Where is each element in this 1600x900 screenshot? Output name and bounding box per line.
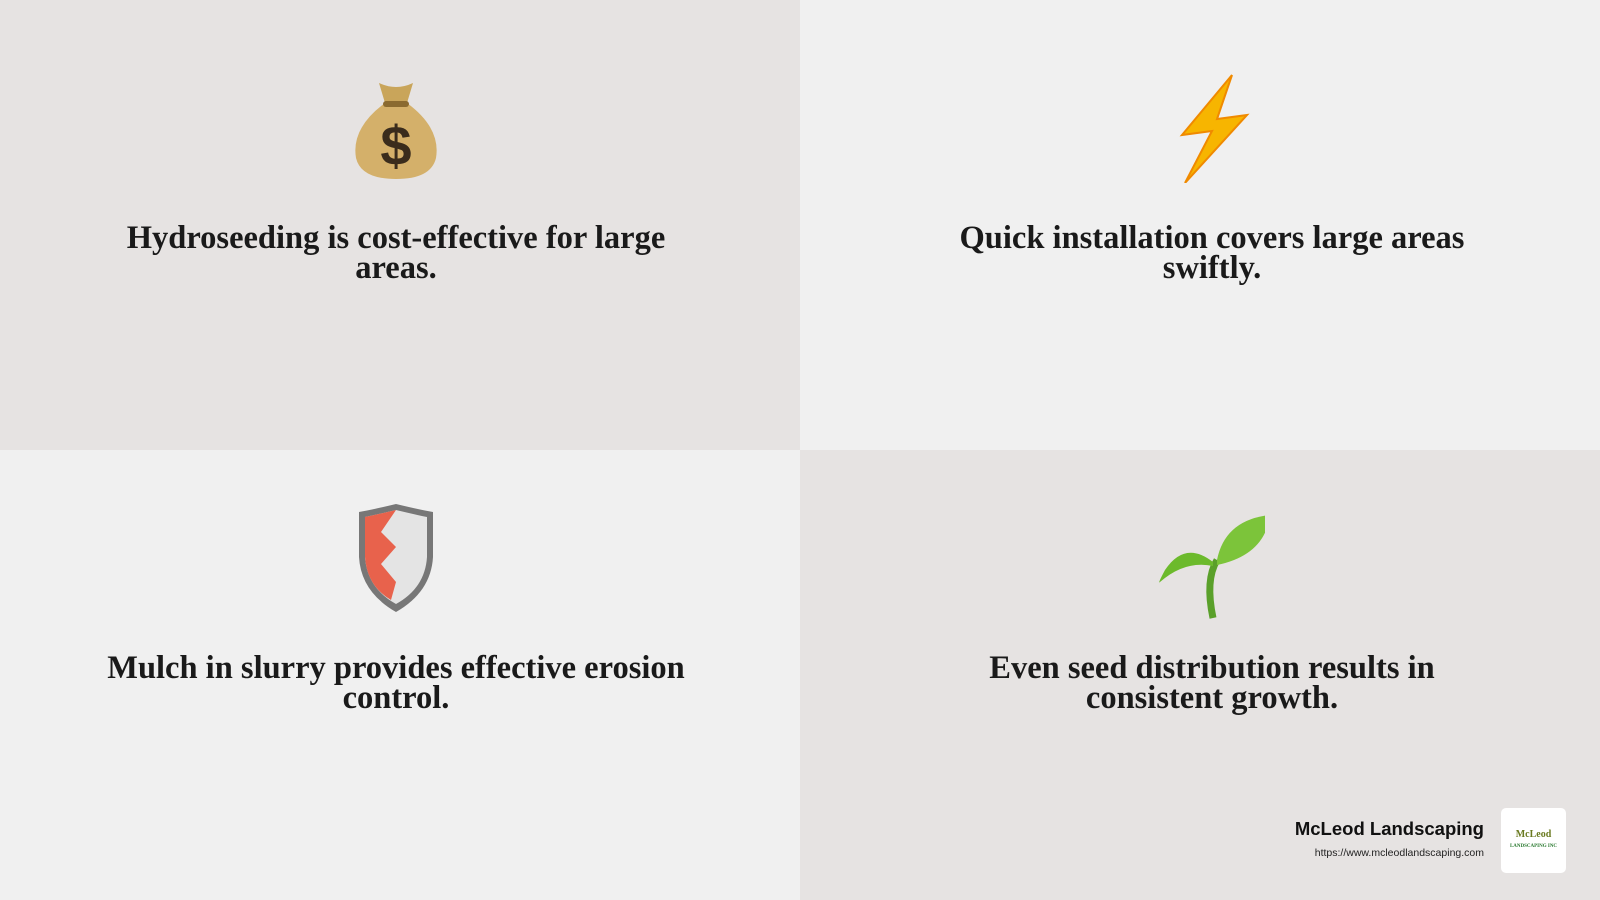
logo <box>1501 808 1566 873</box>
panel: cost-effective <box>0 0 800 450</box>
heading: consistent growth <box>989 650 1435 716</box>
brand name: McLeod Landscaping <box>1295 818 1484 839</box>
heading: cost-effective: areas. <box>355 250 437 286</box>
panel: quick installation <box>800 0 1600 450</box>
brand url: https://www.mcleodlandscaping.com <box>1315 847 1484 859</box>
icon: money bag <box>355 83 437 179</box>
logo: LANDSCAPING INC <box>1510 844 1557 849</box>
icon: sprout <box>1159 516 1265 619</box>
heading: erosion control: control. <box>343 680 449 716</box>
heading: quick installation: swiftly. <box>1163 250 1261 286</box>
icon: shield <box>359 504 433 612</box>
panel: erosion control <box>0 450 800 900</box>
panel: consistent growth <box>800 450 1600 900</box>
heading: erosion control: Mulch in slurry provides effective erosion <box>107 650 685 686</box>
logo: McLeod <box>1516 829 1551 840</box>
brand block <box>1295 808 1566 873</box>
heading: quick installation: Quick installation covers large areas <box>960 220 1464 256</box>
icon: money bag: $ <box>380 114 412 177</box>
heading: quick installation <box>960 220 1464 286</box>
heading: erosion control <box>107 650 685 716</box>
heading: consistent growth: consistent growth. <box>1086 680 1338 716</box>
heading: consistent growth: Even seed distribution results in <box>989 650 1435 686</box>
icon: lightning <box>1180 74 1250 183</box>
heading: cost-effective <box>127 220 665 286</box>
heading: cost-effective: Hydroseeding is cost-effective for large <box>127 220 665 256</box>
